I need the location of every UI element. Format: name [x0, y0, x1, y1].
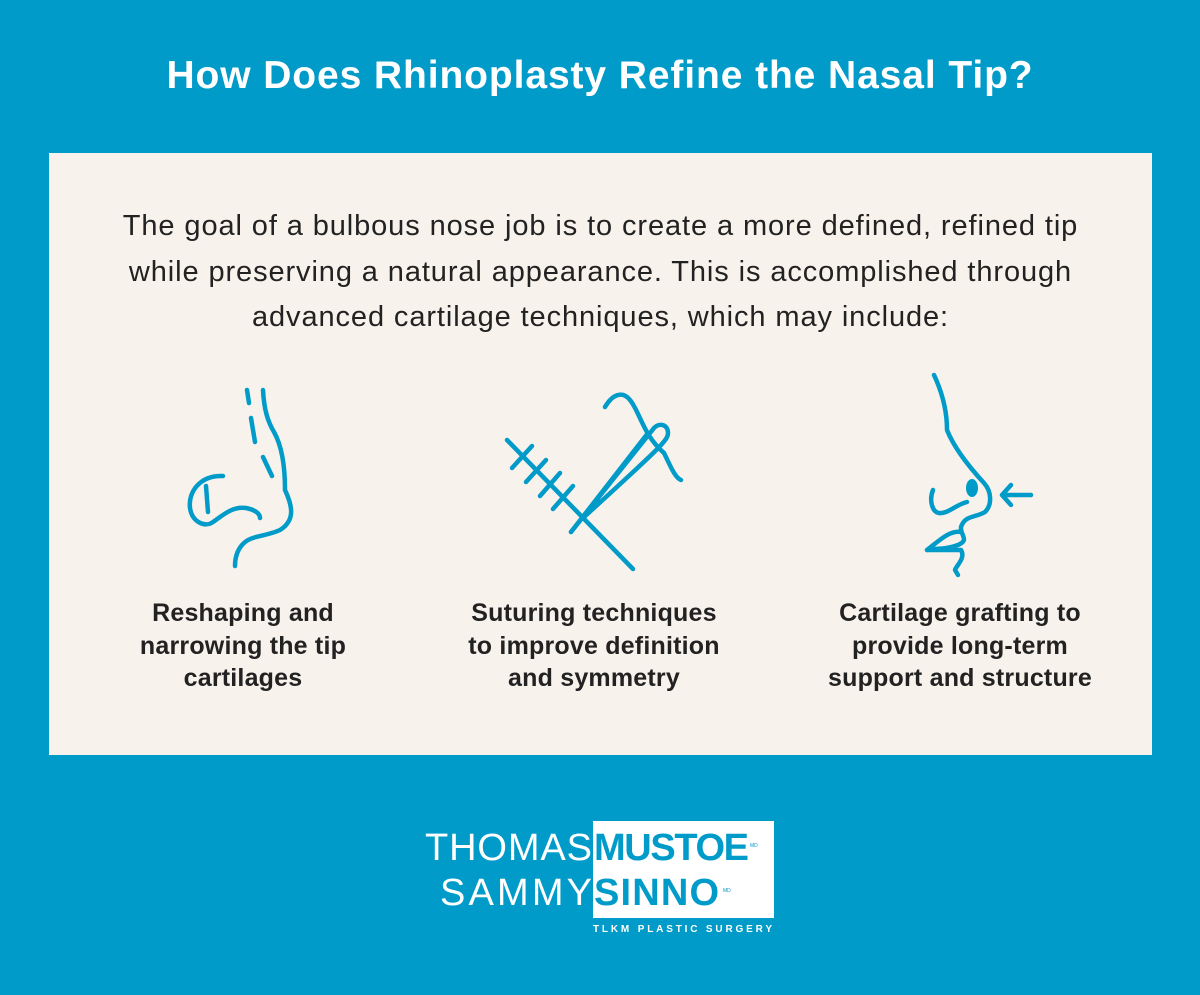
caption: reshaping: narrowing the tip [140, 632, 346, 660]
logo: MD [723, 888, 731, 894]
caption: grafting: Cartilage grafting to [839, 599, 1081, 627]
logo: TLKM PLASTIC SURGERY [593, 924, 775, 935]
caption: reshaping: Reshaping and [152, 599, 334, 627]
logo: THOMAS [425, 827, 591, 869]
logo: MD [750, 843, 758, 849]
intro text: while preserving a natural appearance. This is accomplished through [129, 256, 1072, 288]
intro text: The goal of a bulbous nose job is to create a more defined, refined tip [123, 210, 1078, 242]
caption: grafting [828, 599, 1092, 692]
caption: grafting: provide long-term [852, 632, 1068, 660]
logo [425, 821, 775, 935]
caption: grafting: support and structure [828, 664, 1092, 692]
panel: techniques [49, 153, 1152, 755]
icon: suture needle [507, 395, 681, 569]
caption: reshaping [140, 599, 346, 692]
title: How Does Rhinoplasty Refine the Nasal Tip? [166, 54, 1034, 97]
intro text: advanced cartilage techniques, which may include: [252, 301, 949, 333]
caption: reshaping: cartilages [184, 664, 302, 692]
intro text [123, 210, 1078, 333]
caption: suturing: Suturing techniques [471, 599, 717, 627]
logo: SINNO [594, 872, 719, 914]
caption: suturing [468, 599, 720, 692]
logo: MUSTOE [594, 827, 749, 869]
caption: suturing: to improve definition [468, 632, 720, 660]
caption: suturing: and symmetry [508, 664, 680, 692]
icon: nose reshaping [190, 390, 291, 566]
logo: SAMMY [440, 872, 592, 914]
icon: nose profile with graft [927, 375, 1031, 575]
